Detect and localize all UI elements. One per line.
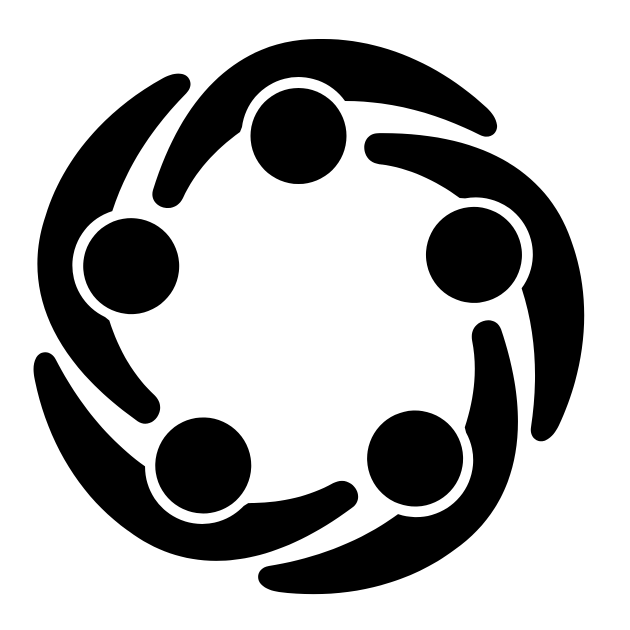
figure: left person xyxy=(0,47,261,427)
figure: lower left person xyxy=(0,290,364,630)
figure: right person xyxy=(360,86,628,466)
figure: top person xyxy=(152,39,497,208)
figure: lower right person xyxy=(212,314,590,630)
